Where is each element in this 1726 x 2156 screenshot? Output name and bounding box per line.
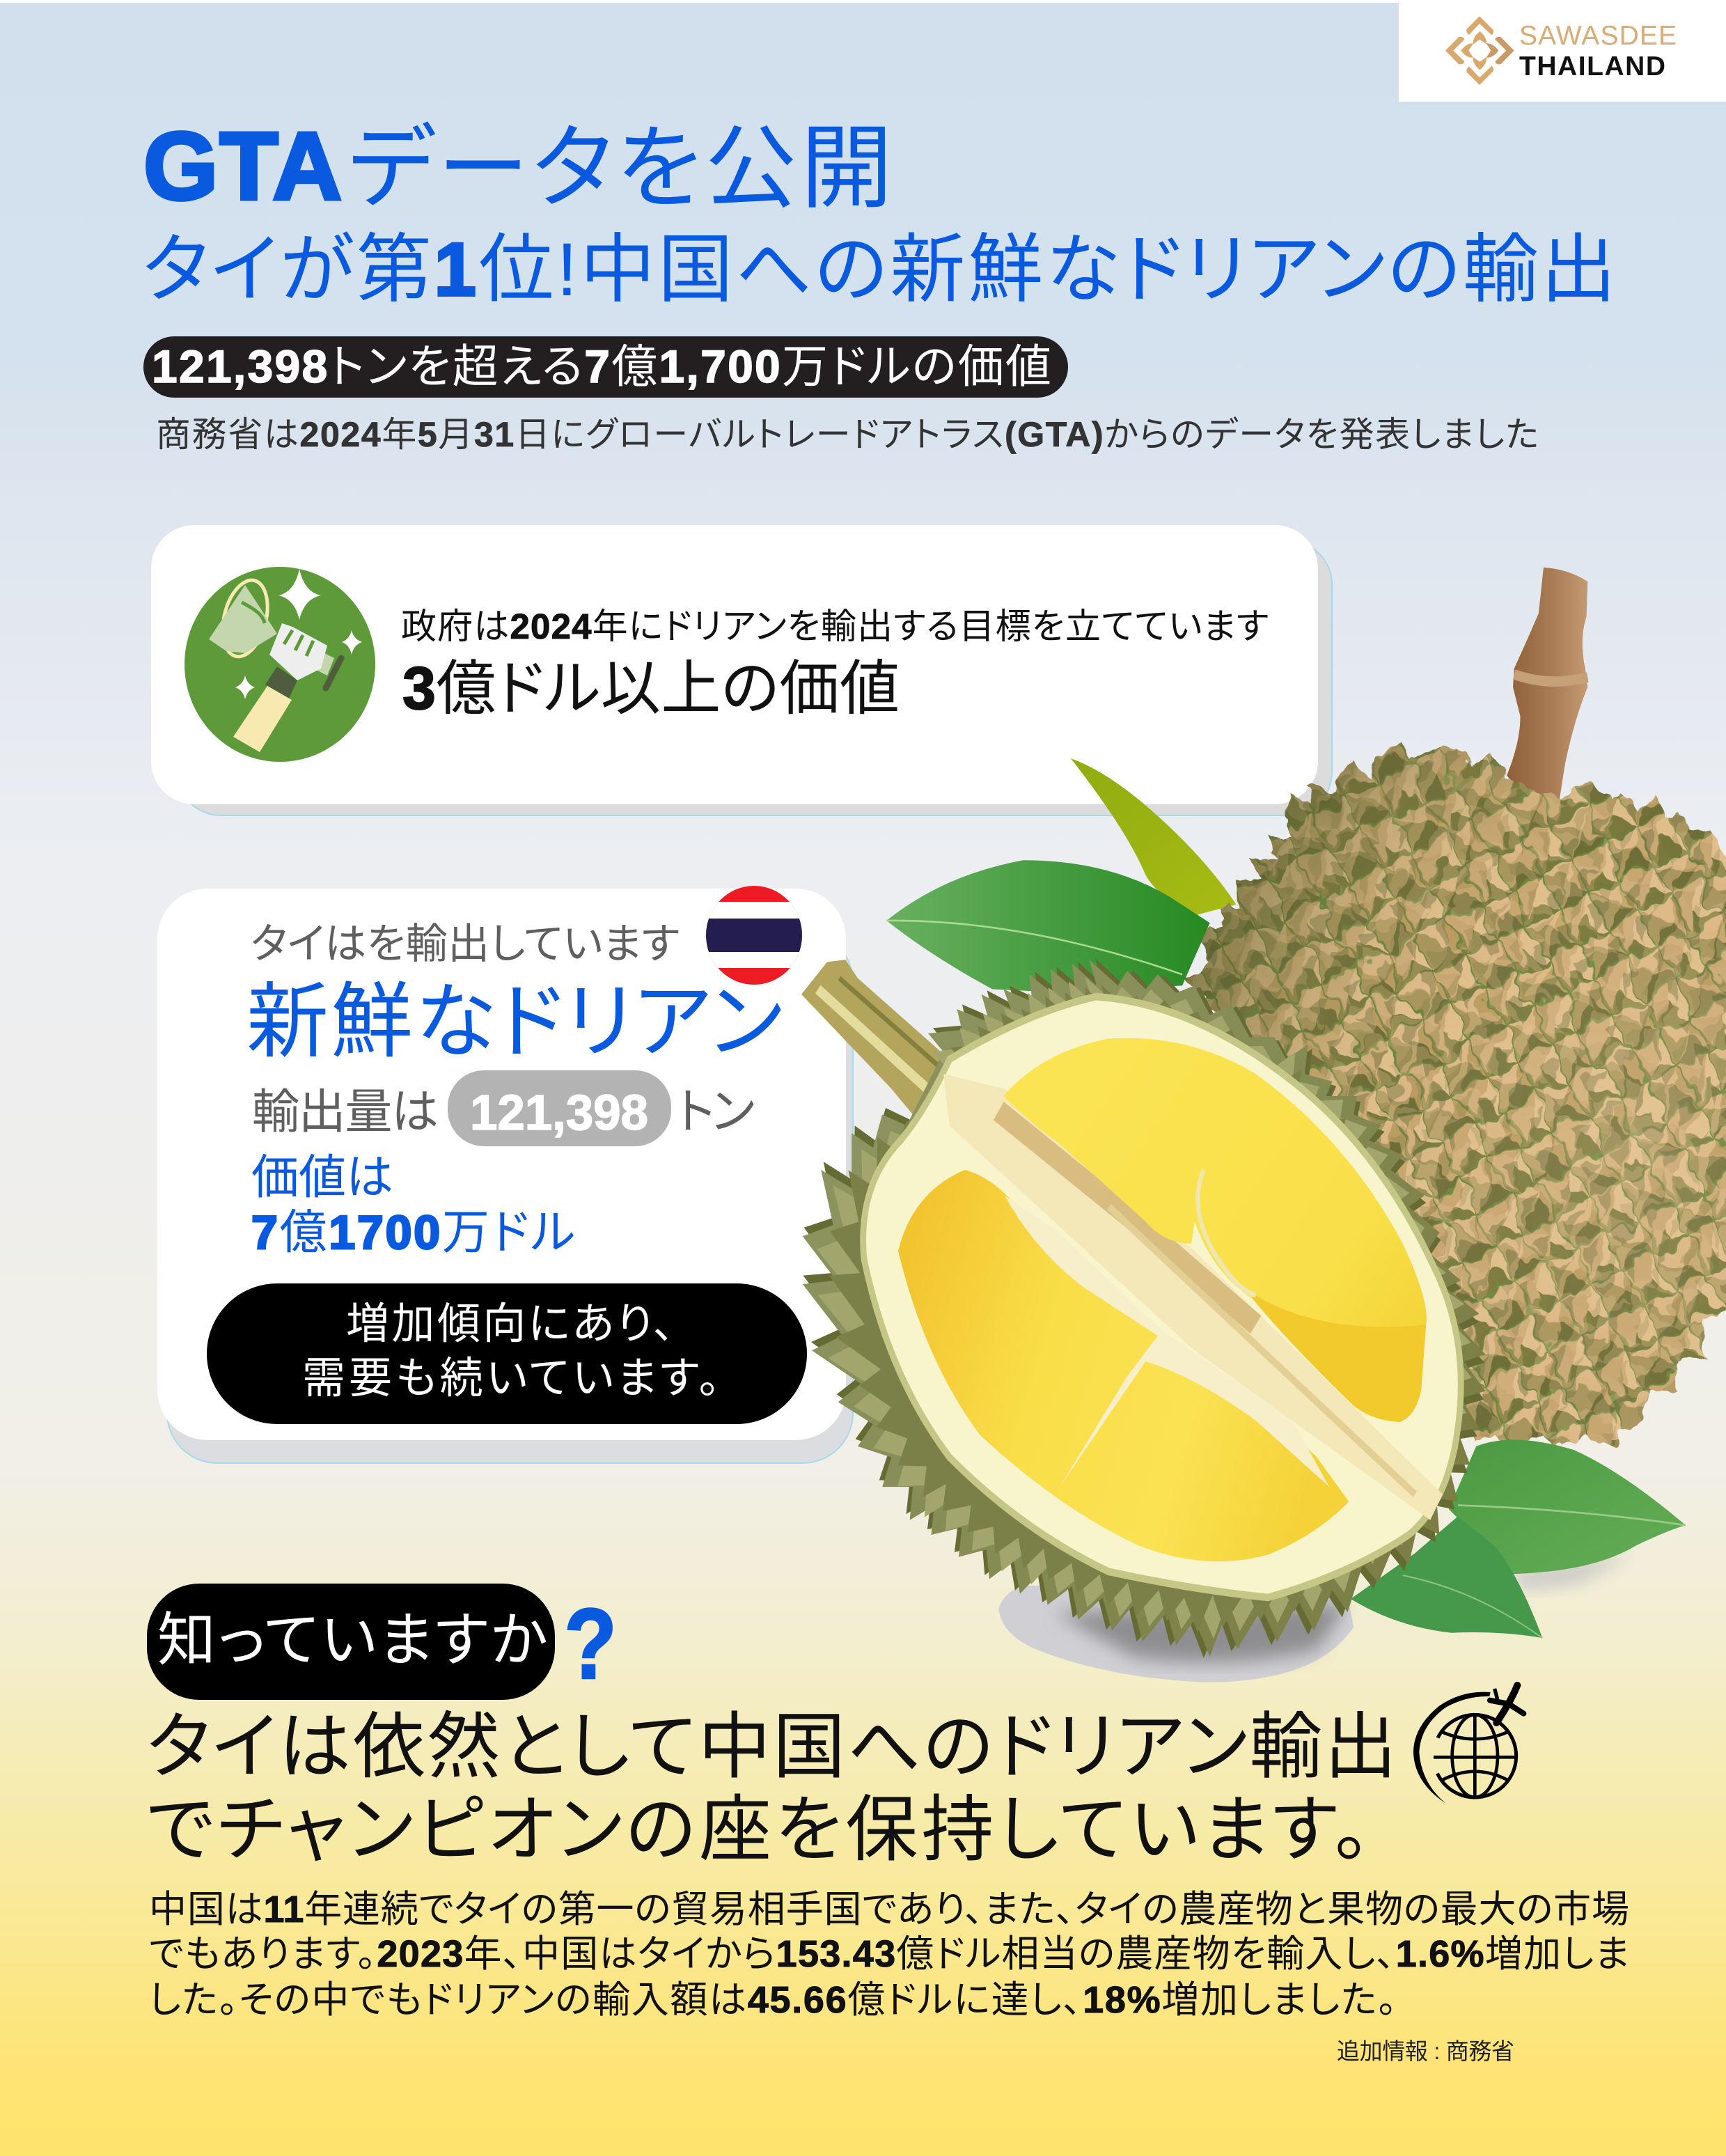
fresh durian heading: 新鮮なドリアン: [246, 976, 783, 1068]
title: GTA: [143, 113, 342, 220]
value lines: [251, 1151, 575, 1259]
illustration: durians and leaves: [797, 568, 1726, 1682]
headline: champion: [147, 1707, 1397, 1870]
logo: Sawasdee Thailand: [1399, 0, 1726, 102]
export intro: タイはを輸出しています: [251, 921, 680, 967]
back durian stem: [1507, 568, 1587, 799]
icon: globe with plane: [1413, 1685, 1523, 1803]
back durian body: [1182, 741, 1726, 1446]
lower flesh lobe: [898, 1170, 1349, 1561]
ground shadow: [998, 1553, 1635, 1682]
leaf: bottom: [1351, 1516, 1542, 1638]
target sentence: 政府は2024年にドリアンを輸出する目標を立てています: [401, 607, 1269, 646]
headline: champion: タイは依然として中国へのドリアン輸出: [147, 1707, 1397, 1788]
leaf: big top: [886, 860, 1210, 993]
volume line: 121,398: [470, 1086, 648, 1141]
front durian cream flesh rim: [863, 997, 1461, 1598]
pill: rising demand: 増加傾向にあり、: [346, 1300, 675, 1348]
value lines: 7億1700万ドル: [251, 1206, 575, 1259]
icon: Thai flag: [706, 886, 802, 985]
source note: 追加情報 : 商務省: [1337, 2038, 1514, 2064]
leaf: bottom right: [1449, 1439, 1686, 1574]
panel: Thai fresh durian exports: [157, 884, 853, 1463]
headline: champion: でチャンピオンの座を保持しています。: [147, 1790, 1370, 1870]
body paragraph: でもあります。2023年、中国はタイから153.43億ドル相当の農産物を輸入し、1.6%増加しま: [149, 1933, 1629, 1975]
title: データを公開: [348, 117, 893, 219]
pill: rising demand: [207, 1283, 807, 1424]
value lines: 価値は: [251, 1151, 393, 1204]
body paragraph: 中国は11年連続でタイの第一の貿易相手国であり、また、タイの農産物と果物の最大の市場: [149, 1889, 1629, 1930]
front durian spiky rind: [797, 951, 1491, 1665]
volume line: 輸出量は: [252, 1086, 439, 1139]
leaf: small yellow-green: [1071, 758, 1236, 916]
icon: logo diamond: [1445, 16, 1514, 85]
body paragraph: した。その中でもドリアンの輸入額は45.66億ドルに達し、18%増加しました。: [149, 1979, 1397, 2021]
centre seam: [943, 1074, 1443, 1520]
front durian stem: [801, 960, 962, 1114]
question mark: ?: [564, 1588, 617, 1700]
target value: 3億ドル以上の価値: [402, 655, 900, 722]
pill: rising demand: 需要も続いています。: [302, 1354, 720, 1403]
subtitle text: 商務省は2024年5月31日にグローバルトレードアトラス(GTA)からのデータを発表しました: [156, 415, 1539, 454]
volume line: [252, 1070, 755, 1146]
title: [143, 113, 1616, 311]
logo: Sawasdee Thailand: SAWASDEE: [1519, 21, 1677, 51]
body paragraph: [149, 1889, 1629, 2021]
panel: export target: [151, 525, 1332, 815]
badge: do you know: [147, 1584, 555, 1700]
title: タイが第1位!中国への新鮮なドリアンの輸出: [143, 227, 1616, 311]
icon: trophy in hand: [185, 567, 375, 762]
pill: headline value: 121,398トンを超える7億1,700万ドルの価値: [152, 341, 1051, 392]
badge: do you know: 知っていますか: [157, 1607, 547, 1673]
volume line: トン: [677, 1084, 755, 1139]
logo: Sawasdee Thailand: THAILAND: [1519, 52, 1665, 81]
upper flesh lobe: [1003, 1038, 1427, 1422]
